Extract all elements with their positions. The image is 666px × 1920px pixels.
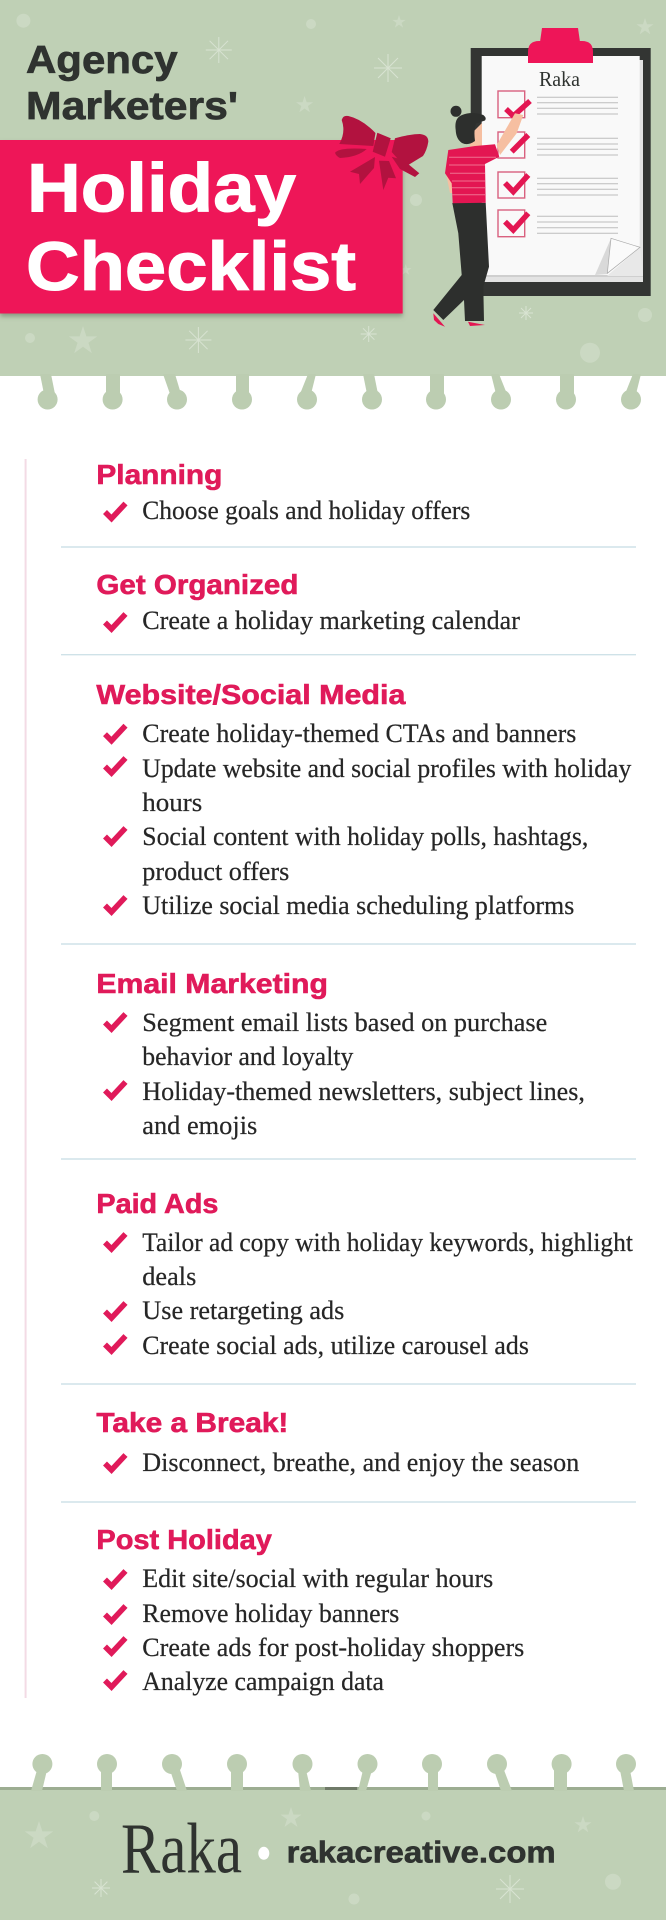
section: Website/Social Media: Create holiday-themed CTAs and banners <box>142 718 576 748</box>
panel: footer background <box>0 1787 666 1920</box>
section: Post Holiday: Analyze campaign data <box>142 1666 384 1696</box>
title: Agency Marketers': Marketers' <box>26 85 238 128</box>
website url: rakacreative.com <box>287 1835 556 1870</box>
clipboard clip <box>528 28 593 63</box>
title: Agency Marketers' <box>26 39 238 128</box>
section: Email Marketing: behavior and loyalty <box>142 1041 354 1071</box>
section: Planning: Planning <box>96 459 222 490</box>
section: Email Marketing: Holiday-themed newsletters, subject lines, <box>142 1076 585 1106</box>
section: Post Holiday: Post Holiday <box>96 1524 273 1555</box>
section: Take a Break!: Take a Break! <box>96 1407 288 1438</box>
section: Planning: Choose goals and holiday offers <box>142 495 470 525</box>
banner: Holiday Checklist: Checklist <box>26 228 356 305</box>
section: Get Organized <box>96 569 520 635</box>
section: Website/Social Media: Update website and social profiles with holiday <box>142 753 632 783</box>
title: Agency Marketers': Agency <box>26 39 178 82</box>
section: Paid Ads: Paid Ads <box>96 1188 218 1219</box>
section: Paid Ads: Tailor ad copy with holiday keywords, highlight <box>142 1227 634 1257</box>
section: Email Marketing: and emojis <box>142 1110 257 1140</box>
checklist rows <box>498 91 618 237</box>
section: Post Holiday: Edit site/social with regular hours <box>142 1563 493 1593</box>
icon: page curl <box>595 238 643 276</box>
section: Email Marketing <box>96 968 585 1140</box>
dot separator <box>258 1847 269 1860</box>
section: Post Holiday: Create ads for post-holiday shoppers <box>142 1632 524 1662</box>
timeline rule <box>25 459 27 1698</box>
section: Website/Social Media: hours <box>142 787 202 817</box>
banner: Holiday Checklist <box>0 140 403 314</box>
section: Website/Social Media <box>96 679 632 920</box>
section: Paid Ads <box>96 1188 634 1360</box>
section: Website/Social Media: Social content with holiday polls, hashtags, <box>142 821 588 851</box>
section: Planning <box>96 459 470 525</box>
section: Email Marketing: Email Marketing <box>96 968 328 999</box>
section: Paid Ads: Use retargeting ads <box>142 1295 344 1325</box>
icon: gift bow <box>335 116 428 190</box>
section: Paid Ads: Create social ads, utilize carousel ads <box>142 1330 529 1360</box>
section: Take a Break! <box>96 1407 579 1477</box>
section: Take a Break!: Disconnect, breathe, and enjoy the season <box>142 1447 579 1477</box>
panel: header background <box>0 0 666 376</box>
logo: Raka: Raka <box>121 1808 242 1888</box>
panel: torn paper notches bottom <box>31 1754 636 1791</box>
section: Email Marketing: Segment email lists based on purchase <box>142 1007 547 1037</box>
section: Post Holiday <box>96 1524 524 1696</box>
illustration: clipboard with checklist <box>471 28 651 296</box>
section: Paid Ads: deals <box>142 1261 196 1291</box>
illustration: woman ticking checklist <box>433 106 523 327</box>
section: Website/Social Media: Website/Social Media <box>96 679 406 710</box>
section: Post Holiday: Remove holiday banners <box>142 1598 399 1628</box>
logo on paper: Raka <box>539 67 581 91</box>
section: Website/Social Media: product offers <box>142 856 289 886</box>
section: Get Organized: Create a holiday marketing calendar <box>142 605 520 635</box>
section: Website/Social Media: Utilize social media scheduling platforms <box>142 890 574 920</box>
panel: torn paper notches top <box>38 374 641 410</box>
section: Get Organized: Get Organized <box>96 569 298 600</box>
banner: Holiday Checklist: Holiday <box>27 150 296 226</box>
